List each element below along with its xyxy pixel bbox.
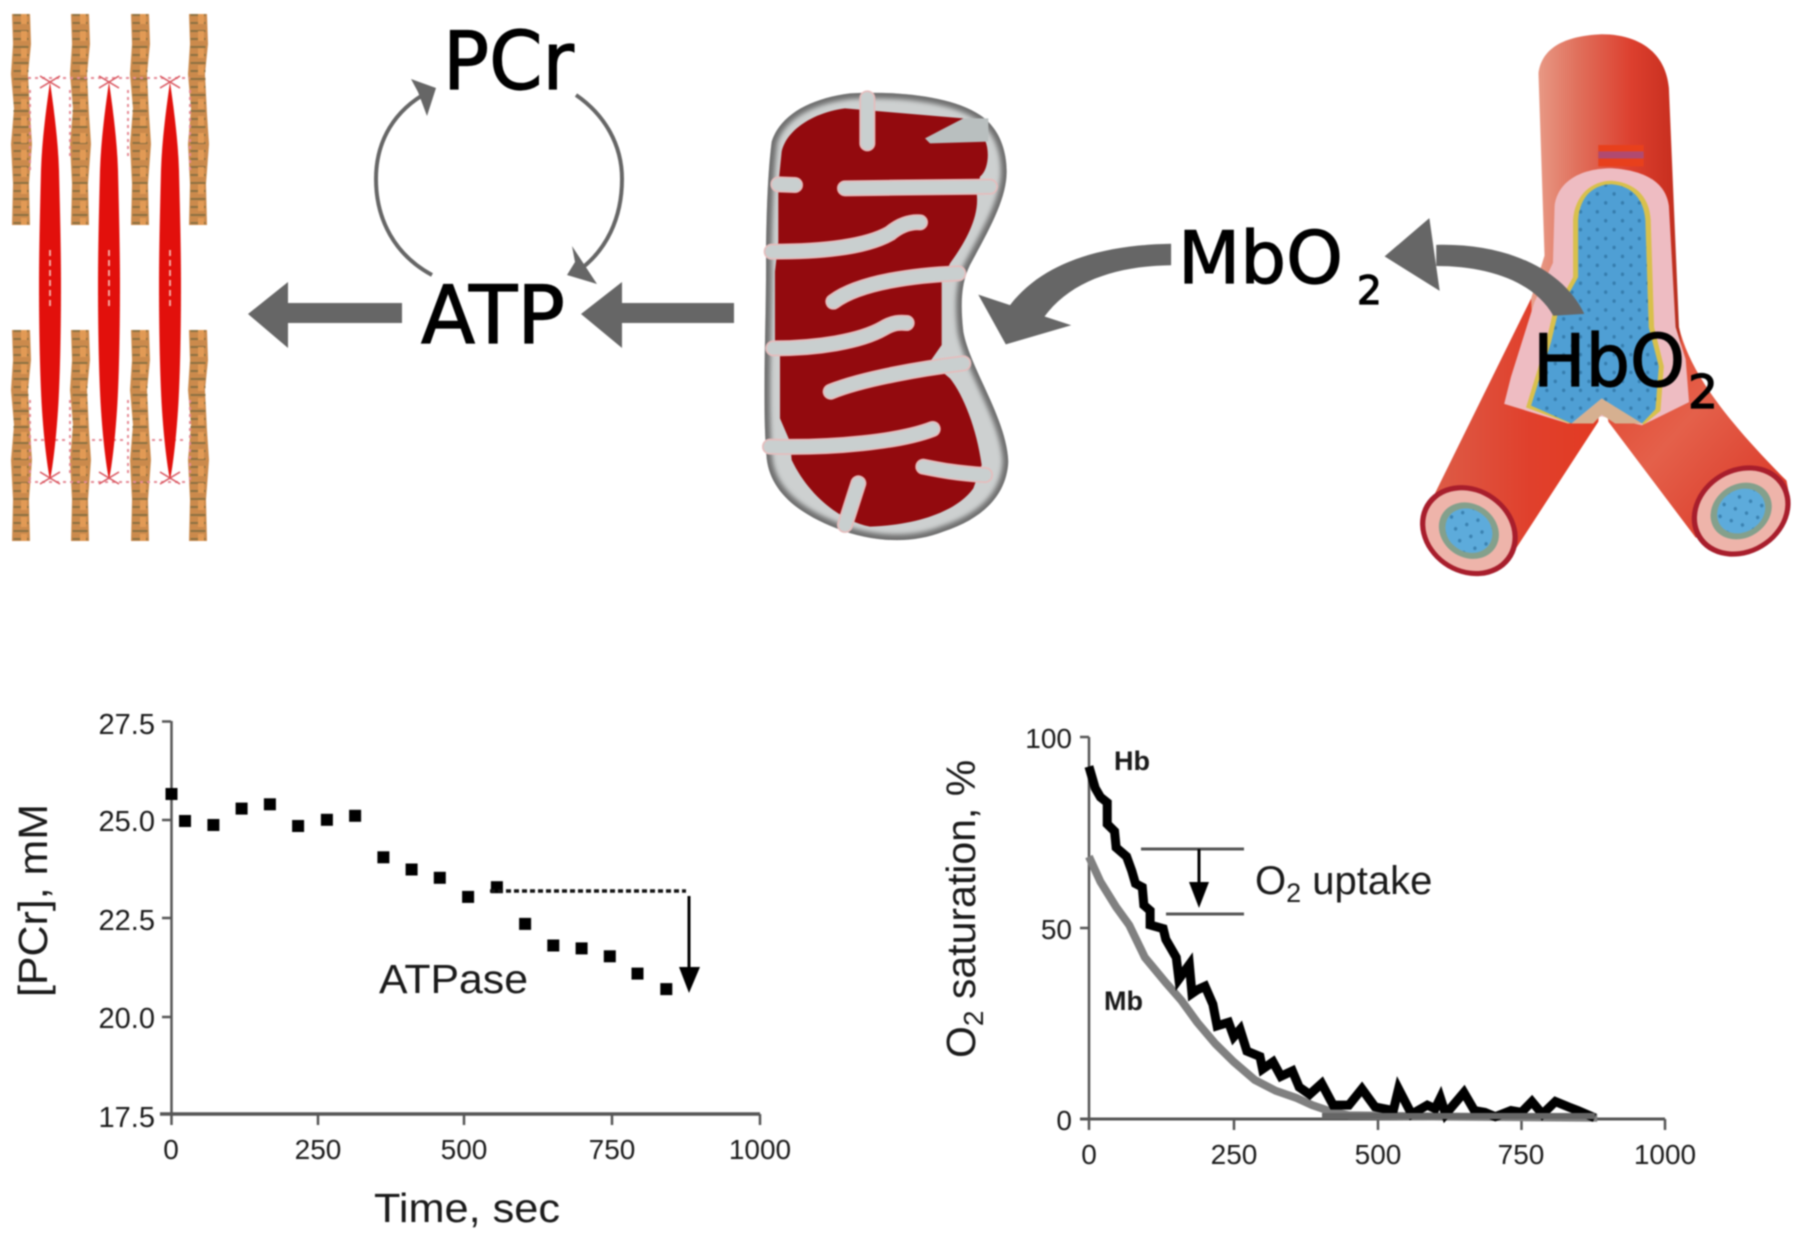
x tick labels xyxy=(1081,1139,1696,1170)
y tick labels: 0 xyxy=(1056,1105,1072,1136)
vessel left branch xyxy=(1422,299,1602,549)
label: O2 uptake: O xyxy=(1255,859,1286,903)
axes xyxy=(160,721,760,1125)
arrow: PCr drop xyxy=(679,896,700,993)
vessel lumen xyxy=(1531,184,1659,424)
y axis title: O xyxy=(938,1026,984,1058)
chart: O2 saturation over time xyxy=(938,723,1696,1170)
x tick labels: 1000 xyxy=(1634,1139,1696,1170)
icon: mitochondrion xyxy=(764,93,1008,540)
left branch cross-section xyxy=(1406,469,1532,593)
label: O2 uptake: 2 xyxy=(1286,878,1301,908)
x axis title: Time, sec xyxy=(374,1185,560,1231)
x tick labels: 1000 xyxy=(729,1134,791,1165)
vessel cut section wall xyxy=(1504,168,1689,425)
x tick labels xyxy=(163,1134,791,1165)
vessel crotch wall xyxy=(1571,399,1642,424)
y tick labels xyxy=(1025,723,1072,1136)
y tick labels: 50 xyxy=(1041,914,1072,945)
chart: PCr over time xyxy=(10,709,791,1231)
label: MbO2 xyxy=(1178,216,1382,314)
x tick labels: 250 xyxy=(1211,1139,1257,1170)
y tick labels: 22.5 xyxy=(99,905,155,937)
label: O2 uptake: uptake xyxy=(1301,859,1432,903)
y axis title: 2 xyxy=(958,1011,989,1026)
y tick labels: 20.0 xyxy=(99,1003,155,1035)
y tick labels: 25.0 xyxy=(99,806,155,838)
x tick labels: 750 xyxy=(589,1134,635,1165)
y axis title: [PCr], mM xyxy=(10,804,56,997)
x tick labels: 500 xyxy=(1355,1139,1401,1170)
thick filaments xyxy=(39,76,181,484)
thin filaments bottom row xyxy=(11,330,209,541)
thin filaments top row xyxy=(11,14,209,225)
arrow: mitochondrion to ATP xyxy=(581,282,734,348)
dotted reference line xyxy=(490,889,686,893)
icon: myofibril sarcomere xyxy=(11,14,209,541)
y axis title: saturation, % xyxy=(938,760,984,1011)
arrow: ATP to myofibril xyxy=(248,282,402,348)
arrow: ATP to PCr cycle xyxy=(376,79,436,275)
y tick labels xyxy=(99,709,155,1134)
arrow: PCr to ATP cycle xyxy=(567,95,622,284)
right branch cross-section xyxy=(1678,449,1800,573)
label: HbO2: HbO xyxy=(1533,319,1685,403)
x tick labels: 500 xyxy=(441,1134,487,1165)
icon: branching blood vessel xyxy=(1406,34,1800,593)
arrow: O2 uptake xyxy=(1189,849,1209,908)
arrow: MbO2 to mitochondrion xyxy=(978,244,1171,344)
label: HbO2: 2 xyxy=(1688,365,1718,419)
arrow: HbO2 to MbO2 xyxy=(1385,218,1584,316)
data points xyxy=(166,788,672,995)
axes xyxy=(1080,737,1665,1130)
label: MbO2: MbO xyxy=(1178,216,1343,300)
bracket: uptake lines xyxy=(1141,849,1244,914)
x tick labels: 0 xyxy=(1081,1139,1097,1170)
curve: Hb xyxy=(1089,766,1595,1118)
label: PCr: PCr xyxy=(443,15,574,108)
label: MbO2: 2 xyxy=(1357,269,1382,314)
x tick labels: 750 xyxy=(1498,1139,1544,1170)
label: ATPase: ATPase xyxy=(379,956,528,1002)
vessel trunk xyxy=(1531,34,1686,377)
vessel right branch xyxy=(1602,327,1790,538)
curve: Mb xyxy=(1089,857,1597,1118)
y tick labels: 27.5 xyxy=(99,709,155,741)
label: Hb: Hb xyxy=(1114,746,1150,776)
y tick labels: 17.5 xyxy=(99,1102,155,1134)
label: ATP: ATP xyxy=(421,269,565,362)
label: Mb: Mb xyxy=(1104,986,1143,1016)
y tick labels: 100 xyxy=(1025,723,1072,754)
x tick labels: 0 xyxy=(163,1134,179,1165)
x tick labels: 250 xyxy=(295,1134,341,1165)
